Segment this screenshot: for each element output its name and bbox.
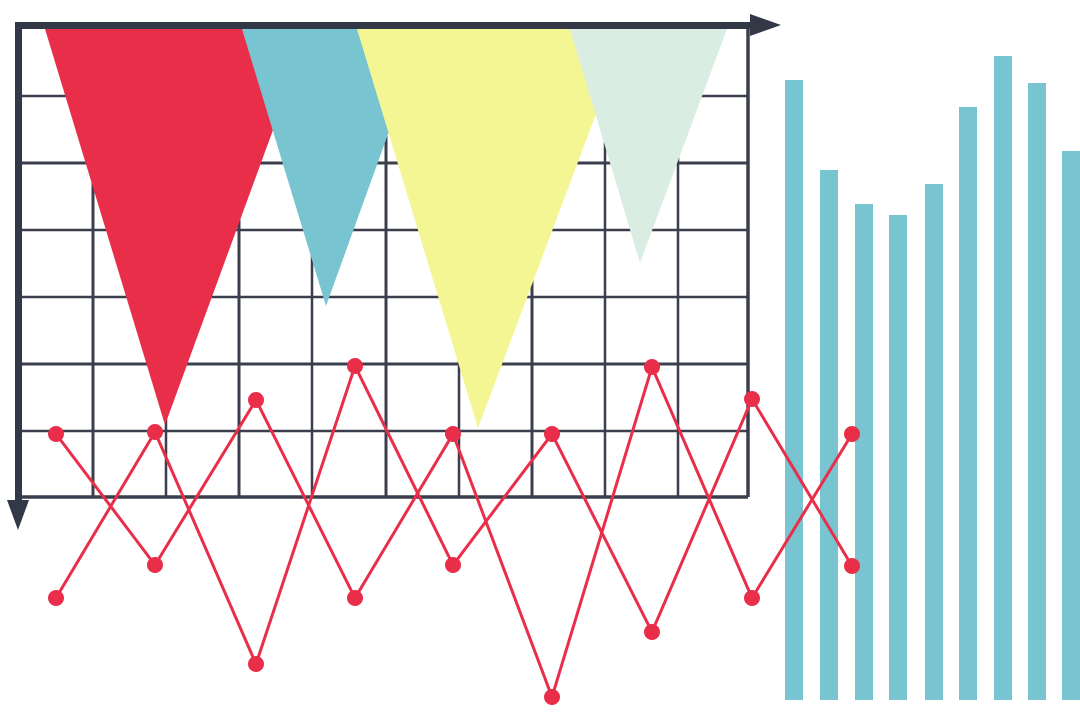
triangles bbox=[45, 29, 727, 428]
axes bbox=[7, 14, 781, 530]
line chart bbox=[56, 366, 852, 697]
bar chart bbox=[785, 56, 1080, 700]
